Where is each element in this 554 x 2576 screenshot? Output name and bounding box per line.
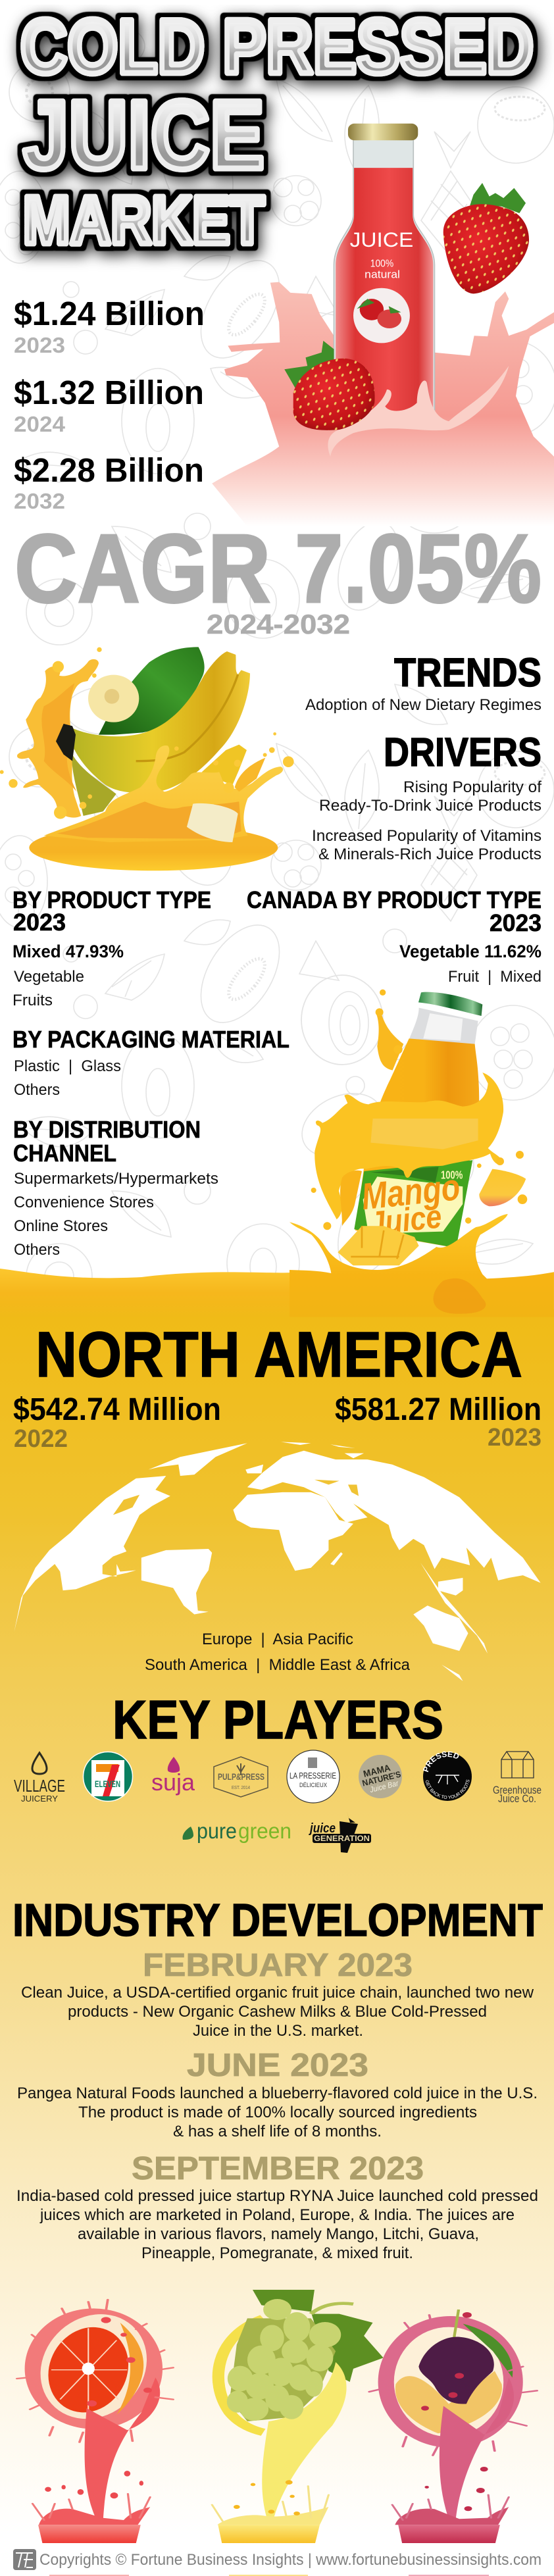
drivers: Increased Popularity of Vitamins <box>312 827 541 845</box>
drivers: & Minerals-Rich Juice Products <box>318 846 541 863</box>
drivers: Rising Popularity of <box>403 778 541 796</box>
by packaging material: Others <box>14 1081 60 1099</box>
logo: pulp and press: EST. 2014 <box>232 1784 250 1790</box>
north america 2023 value: $581.27 Million <box>335 1392 541 1427</box>
bottle label <box>354 1160 472 1248</box>
other regions: South America | Middle East & Africa <box>145 1656 411 1674</box>
heading: key players: KEY PLAYERS <box>113 1689 443 1750</box>
logo: pressed juicery: GET BACK TO YOUR ROOTS <box>425 1779 470 1799</box>
development: february 2023: FEBRUARY 2023 <box>143 1948 413 1983</box>
market value 2032: $2.28 Billion <box>14 451 204 489</box>
logo: la presserie <box>287 1750 340 1803</box>
logo: greenhouse juice co: Juice Co. <box>498 1792 536 1805</box>
left splash arc <box>17 659 99 818</box>
by packaging material <box>13 1026 290 1099</box>
development: february 2023 <box>21 1948 534 2040</box>
bottle juice <box>336 168 433 417</box>
splash <box>212 282 554 526</box>
logo: greenhouse juice co <box>493 1752 541 1805</box>
logo: village juicery: VILLAGE <box>14 1776 65 1796</box>
logo: greenhouse juice co: Greenhouse <box>493 1784 541 1796</box>
bottom glass slivers <box>49 2575 489 2576</box>
title: MARKET <box>23 182 264 258</box>
yellow gradient section background <box>0 1309 554 2576</box>
market value 2024: $1.32 Billion <box>14 374 204 411</box>
foreground splash <box>328 366 509 457</box>
development: september 2023: SEPTEMBER 2023 <box>132 2151 424 2186</box>
wave: left side <box>0 1269 293 1317</box>
development: february 2023: products - New Organic Cashew Milks & Blue Cold-Pressed <box>68 2003 487 2021</box>
mango cubes <box>338 1226 419 1265</box>
north america 2022 value: $542.74 Million <box>13 1392 221 1427</box>
crown splash <box>44 745 283 842</box>
bottle label: Juice <box>368 1198 443 1242</box>
bottle body <box>355 1038 479 1248</box>
development: june 2023: & has a shelf life of 8 months. <box>173 2123 382 2140</box>
copyright text: Copyrights © Fortune Business Insights | www.fortunebusinessinsights.com <box>39 2551 541 2569</box>
logo: puregreen <box>183 1819 291 1843</box>
by product type: 2023 <box>13 909 66 936</box>
north america 2022 value <box>13 1392 221 1453</box>
bottle cap <box>348 124 418 140</box>
bottle label text: 100% <box>370 259 393 270</box>
left top splash <box>376 1009 403 1071</box>
development: june 2023: Pangea Natural Foods launched a blueberry-flavored cold juice in the U.S. <box>17 2084 538 2102</box>
logo: la presserie: LA PRESSERIE <box>290 1771 336 1780</box>
logo: pressed juicery <box>422 1752 472 1801</box>
logo: puregreen: pure <box>197 1819 237 1843</box>
bottle cap <box>418 992 482 1016</box>
illustration: strawberry juice bottle and splash <box>212 124 554 526</box>
development: june 2023 <box>17 2048 538 2140</box>
banana piece <box>187 803 238 842</box>
canada by product type: Fruit | Mixed <box>448 968 541 986</box>
bottle label text: JUICE <box>350 228 413 251</box>
grape juice <box>212 2290 384 2543</box>
by distribution channel: Supermarkets/Hypermarkets <box>14 1170 218 1188</box>
market value 2024: 2024 <box>14 412 66 436</box>
development: september 2023: available in various flavors, namely Mango, Litchi, Guava, <box>78 2225 479 2243</box>
bottle label text: natural <box>365 268 400 280</box>
bottle label text <box>350 228 413 280</box>
lower banana <box>72 755 116 816</box>
logo: pulp and press <box>214 1757 268 1797</box>
leaf <box>99 647 205 735</box>
market value 2032: 2032 <box>14 489 65 513</box>
footer logo <box>13 2549 36 2570</box>
logo: pulp and press: PULP&PRESS <box>218 1771 264 1782</box>
strawberry: right <box>443 183 529 293</box>
main bananas <box>72 651 250 793</box>
logo: puregreen: green <box>238 1819 291 1843</box>
development: september 2023: juices which are marketed in Poland, Europe, & India. The juices are <box>39 2206 515 2224</box>
by distribution channel <box>13 1116 218 1259</box>
logo: suja: suja <box>151 1769 195 1796</box>
development: february 2023: Clean Juice, a USDA-certified organic fruit juice chain, launched two new <box>21 1984 534 2002</box>
illustration: mango juice bottle and wave <box>290 990 554 1317</box>
market value 2023: 2023 <box>14 333 65 357</box>
title <box>20 3 534 258</box>
by distribution channel: Convenience Stores <box>14 1194 154 1211</box>
development: june 2023: The product is made of 100% locally sourced ingredients <box>78 2104 477 2121</box>
by product type: BY PRODUCT TYPE <box>13 886 211 913</box>
canada by product type <box>247 886 541 986</box>
market value 2024 <box>14 374 204 436</box>
banana slice <box>88 675 139 722</box>
bottle label: Mango <box>359 1167 462 1218</box>
strawberry: lower <box>284 341 375 430</box>
by distribution channel: Online Stores <box>14 1217 108 1235</box>
development: june 2023: JUNE 2023 <box>187 2048 368 2083</box>
droplets <box>0 647 294 819</box>
banana stem <box>56 724 76 761</box>
logo: la presserie: DÉLICIEUX <box>299 1782 327 1788</box>
other regions: Europe | Asia Pacific <box>202 1630 353 1648</box>
logo: pressed juicery: PRESSED <box>422 1752 459 1773</box>
by product type: Fruits <box>13 992 53 1009</box>
title: JUICE <box>23 81 264 189</box>
canada by product type: Vegetable 11.62% <box>399 942 541 961</box>
footer band <box>0 2543 554 2575</box>
logo: juice generation: juice <box>308 1821 336 1836</box>
by distribution channel: CHANNEL <box>13 1140 116 1167</box>
logo: juice generation <box>308 1811 371 1853</box>
swirl splash <box>315 1073 504 1219</box>
by product type <box>13 886 211 1009</box>
puddle <box>29 824 278 871</box>
by packaging material: Plastic | Glass <box>14 1057 121 1075</box>
market value 2023: $1.24 Billion <box>14 295 205 332</box>
canada by product type: 2023 <box>490 909 541 936</box>
trends <box>305 650 541 714</box>
development: september 2023 <box>16 2151 538 2262</box>
by packaging material: BY PACKAGING MATERIAL <box>13 1026 290 1053</box>
logo: mama natures: Juice Bar <box>368 1779 400 1794</box>
north america 2023 value <box>335 1392 541 1452</box>
by product type: Vegetable <box>14 968 84 986</box>
logo: village juicery: JUICERY <box>21 1794 58 1804</box>
logo: suja <box>151 1757 195 1796</box>
trends: Adoption of New Dietary Regimes <box>305 696 541 714</box>
fruit line-art pattern <box>0 20 554 1309</box>
illustration: banana splash <box>0 647 294 871</box>
mango slice <box>479 1169 526 1206</box>
by product type: Mixed 47.93% <box>13 942 124 961</box>
CAGR: 2024-2032 <box>207 609 350 640</box>
drivers <box>312 730 541 863</box>
wave and crown <box>290 1214 554 1317</box>
development: september 2023: India-based cold pressed juice startup RYNA Juice launched cold pressed <box>16 2187 538 2205</box>
by distribution channel: BY DISTRIBUTION <box>13 1116 201 1143</box>
development: september 2023: Pineapple, Pomegranate, & mixed fruit. <box>141 2244 413 2262</box>
logo: 7-eleven <box>83 1752 133 1802</box>
by distribution channel: Others <box>14 1241 60 1259</box>
drivers: Ready-To-Drink Juice Products <box>319 797 541 815</box>
logo: mama natures <box>359 1755 404 1798</box>
bottle label badge <box>353 288 410 343</box>
market value 2032 <box>14 451 204 513</box>
development: february 2023: Juice in the U.S. market. <box>193 2022 363 2040</box>
north america 2023 value: 2023 <box>488 1424 541 1452</box>
logo: mama natures: MAMA <box>362 1762 391 1779</box>
logo: village juicery <box>14 1753 65 1804</box>
bottle neck <box>409 1008 478 1044</box>
market value 2023 <box>14 295 205 357</box>
other regions <box>145 1630 411 1674</box>
droplets <box>311 990 527 1230</box>
illustration: three fruit juice splashes <box>17 2290 537 2543</box>
bottle glass <box>334 139 435 417</box>
world globe map <box>14 1442 541 1681</box>
logo: mama natures: NATURE'S <box>361 1769 402 1788</box>
logo: juice generation: GENERATION <box>314 1834 370 1843</box>
logo: 7-eleven: ELEVEN <box>95 1779 120 1789</box>
grapefruit juice <box>17 2300 173 2543</box>
small right banana <box>202 745 247 785</box>
north america 2022 value: 2022 <box>14 1425 68 1453</box>
plum juice <box>369 2310 537 2543</box>
bottle label: 100% <box>441 1169 463 1182</box>
